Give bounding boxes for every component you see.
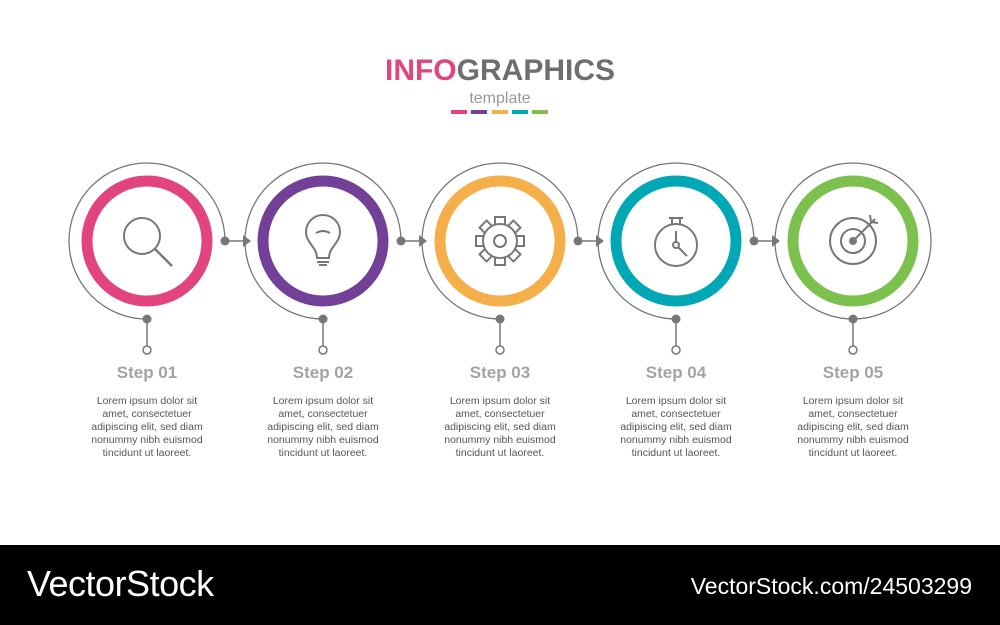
title: INFOGRAPHICS [385, 54, 615, 87]
footer brand: VectorStock [27, 563, 214, 604]
footer url: VectorStock.com/24503299 [691, 573, 972, 599]
text: adipiscing elit, sed diam [444, 421, 556, 433]
step 2 circle: bulb [245, 163, 427, 354]
text: nonummy nibh euismod [444, 434, 556, 446]
text: amet, consectetuer [808, 408, 898, 420]
text: Lorem ipsum dolor sit [803, 395, 903, 407]
step 3 circle: gear [422, 163, 604, 354]
step 5 text: Step 05 [823, 363, 883, 382]
text: nonummy nibh euismod [797, 434, 909, 446]
color key bars [451, 110, 548, 114]
text: adipiscing elit, sed diam [91, 421, 203, 433]
text: amet, consectetuer [102, 408, 192, 420]
step 5 circle: target [775, 163, 931, 354]
text: amet, consectetuer [278, 408, 368, 420]
step 3 text: Step 03 [470, 363, 530, 382]
text: tincidunt ut laoreet. [456, 447, 544, 459]
text: amet, consectetuer [455, 408, 545, 420]
subtitle: template [469, 90, 531, 107]
text: nonummy nibh euismod [91, 434, 203, 446]
text: tincidunt ut laoreet. [103, 447, 191, 459]
step 1 text: Step 01 [117, 363, 177, 382]
step 4 text: Step 04 [646, 363, 706, 382]
text: nonummy nibh euismod [620, 434, 732, 446]
text: Lorem ipsum dolor sit [626, 395, 726, 407]
text: tincidunt ut laoreet. [809, 447, 897, 459]
step 4 circle: stopwatch [598, 163, 780, 354]
step 2 text: Step 02 [293, 363, 353, 382]
text: Lorem ipsum dolor sit [450, 395, 550, 407]
text: adipiscing elit, sed diam [620, 421, 732, 433]
text: Lorem ipsum dolor sit [273, 395, 373, 407]
step 1 circle: search [69, 163, 251, 354]
text: tincidunt ut laoreet. [279, 447, 367, 459]
text: tincidunt ut laoreet. [632, 447, 720, 459]
footer bar [0, 545, 1000, 625]
text: adipiscing elit, sed diam [267, 421, 379, 433]
text: nonummy nibh euismod [267, 434, 379, 446]
text: amet, consectetuer [631, 408, 721, 420]
text: adipiscing elit, sed diam [797, 421, 909, 433]
text: Lorem ipsum dolor sit [97, 395, 197, 407]
